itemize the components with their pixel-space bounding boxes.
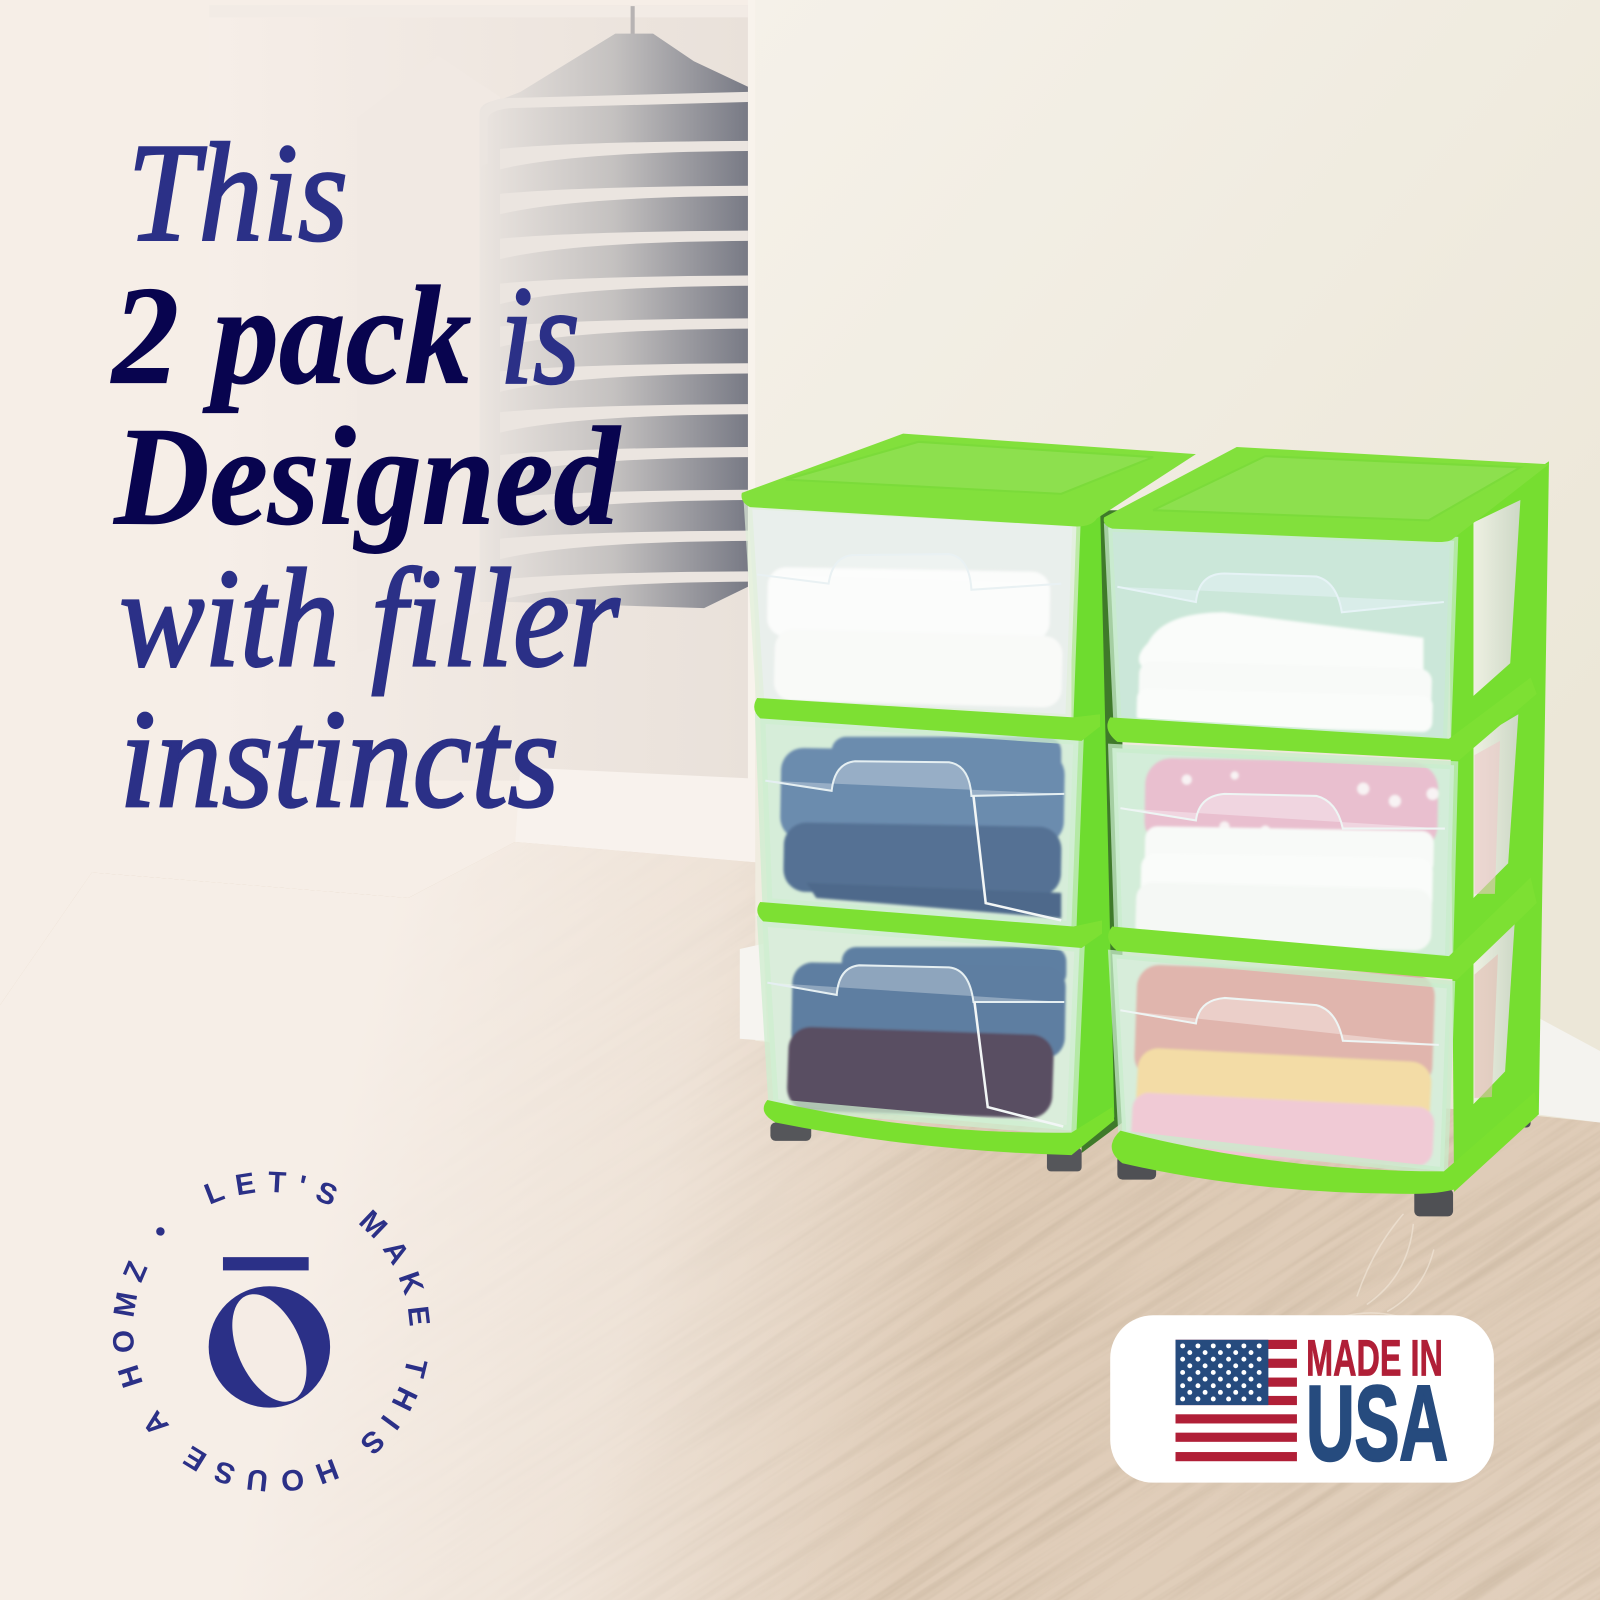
- shelf 1: [754, 698, 1100, 741]
- badge: made in USA: [1110, 1315, 1494, 1483]
- headline: 2 pack: [110, 259, 471, 414]
- faint hanging shirt: [357, 56, 500, 653]
- headline: with filler: [119, 541, 620, 696]
- closet with hanging shirts: [209, 5, 748, 781]
- drawer 1: [748, 505, 1077, 718]
- wood floor: [0, 837, 1600, 1600]
- made in text: MADE IN: [1306, 1330, 1443, 1387]
- drawer 3: [1112, 954, 1451, 1171]
- icon: american flag: [1176, 1340, 1297, 1461]
- baseboards and wall edge: [515, 0, 1600, 1122]
- headline: is: [500, 259, 580, 414]
- wall background: [0, 0, 1600, 1122]
- shelf 1: [1107, 678, 1537, 760]
- unit side frame: [1449, 461, 1549, 1192]
- drawer 3: [762, 921, 1080, 1131]
- shelf 2: [757, 902, 1102, 948]
- bottom rim: [764, 1100, 1114, 1155]
- logo bar: [223, 1257, 309, 1270]
- headline: [110, 116, 622, 837]
- wheels: [1117, 1107, 1531, 1216]
- drawer 2: [1112, 748, 1454, 959]
- unit side: [1071, 500, 1114, 1155]
- circular tagline text: LET'S MAKE THIS HOUSE A HOMZ •: [112, 1172, 430, 1492]
- wheels: [770, 1122, 1082, 1171]
- logo ring: [209, 1283, 330, 1413]
- headline: instincts: [119, 682, 559, 837]
- side windows: [1473, 500, 1520, 1104]
- left drawer unit: [741, 434, 1196, 1171]
- drawer 2: [760, 718, 1079, 927]
- headline: This: [128, 116, 348, 271]
- headline: Designed: [112, 399, 622, 554]
- icon: striped shirt on hanger: [480, 6, 748, 608]
- bottom rim: [1112, 1092, 1539, 1194]
- USA text: USA: [1306, 1363, 1448, 1483]
- shelf 2: [1108, 878, 1537, 980]
- lid: [741, 434, 1196, 527]
- logo: circular tagline badge: [112, 1172, 430, 1492]
- right drawer unit: [1104, 447, 1549, 1216]
- shadow and dark gap: [1082, 510, 1122, 1153]
- drawer 1: [1108, 528, 1454, 741]
- lid: [1104, 447, 1549, 542]
